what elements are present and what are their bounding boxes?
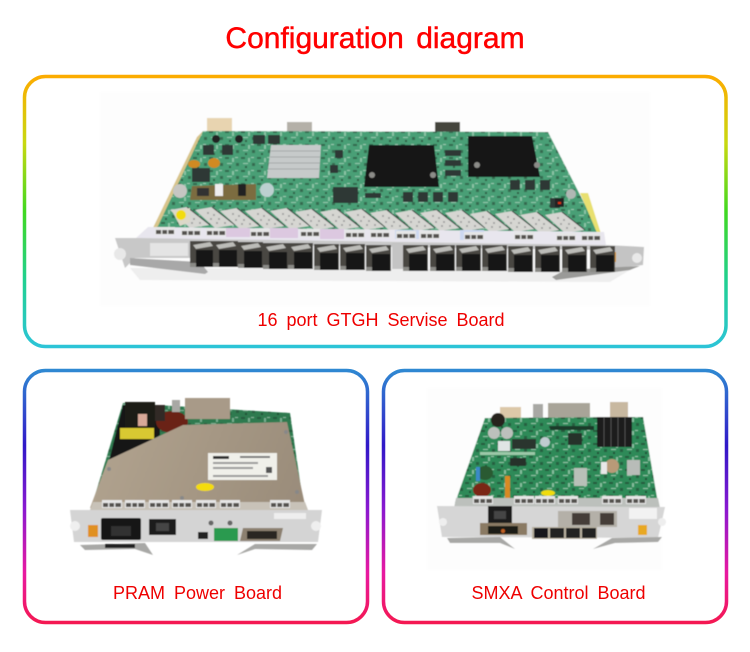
caption: GTGH board: 16 port GTGH Servise Board <box>257 310 505 330</box>
image: SMXA control board <box>427 388 666 570</box>
image: PRAM power board <box>70 398 322 555</box>
panel: GTGH service board <box>24 76 726 346</box>
panel border <box>384 370 726 622</box>
image: 16 port GTGH board <box>100 92 650 306</box>
caption: PRAM board: PRAM Power Board <box>113 583 282 603</box>
panel border <box>24 370 368 622</box>
panel border <box>24 76 726 346</box>
title: Configuration diagram <box>225 22 525 55</box>
panel: SMXA control board <box>384 370 726 622</box>
panel: PRAM power board <box>24 370 368 622</box>
caption: SMXA board: SMXA Control Board <box>471 583 646 603</box>
